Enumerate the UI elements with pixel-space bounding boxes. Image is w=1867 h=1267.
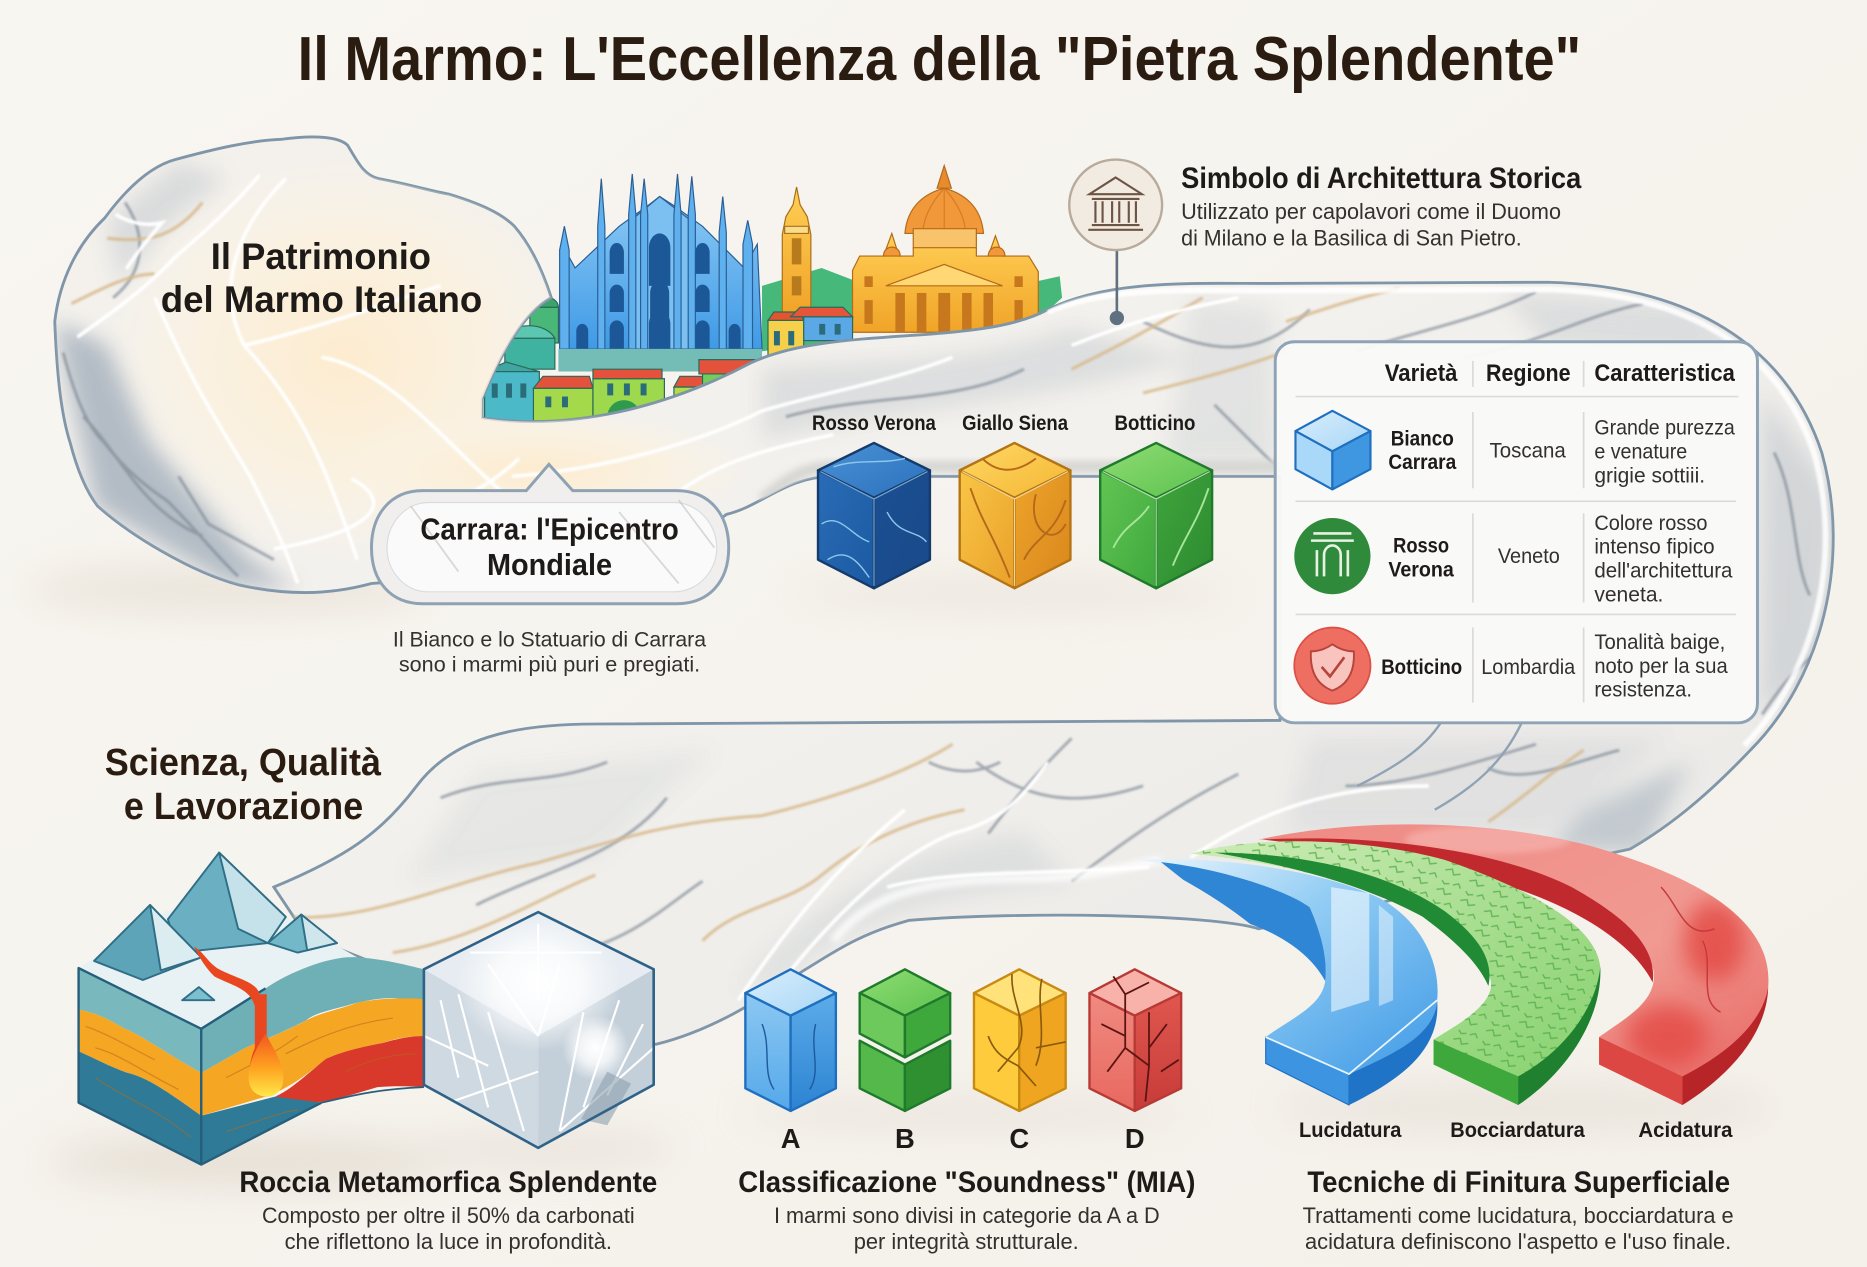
heading: patrimonio xyxy=(161,236,482,320)
row: Botticino: Lombardia xyxy=(1481,655,1575,679)
soundness block B: B xyxy=(895,1123,915,1154)
finish labels: Lucidatura xyxy=(1299,1118,1402,1142)
Basilica di San Pietro xyxy=(853,166,1038,332)
callout: Carrara: Carrara: l'Epicentro xyxy=(420,511,679,546)
text: architecture: Utilizzato per capolavori come il Duomo xyxy=(1181,199,1561,224)
row: Bianco Carrara: e venature xyxy=(1594,439,1687,463)
row: Rosso Verona: Verona xyxy=(1388,558,1454,581)
row: Bianco Carrara: Toscana xyxy=(1490,438,1566,462)
text: Carrara description: Il Bianco e lo Statuario di Carrara xyxy=(393,628,706,652)
heading: scienza xyxy=(105,742,382,828)
row: Rosso Verona: intenso fipico xyxy=(1594,535,1715,559)
text: roccia metamorfica xyxy=(239,1166,657,1254)
finish: lucidatura xyxy=(1131,859,1438,1105)
panel: marble rock and ribbon xyxy=(55,137,1840,1044)
right face layers xyxy=(201,957,424,1073)
town houses xyxy=(485,297,853,426)
text: finiture: Trattamenti come lucidatura, bocciardatura e xyxy=(1303,1203,1734,1228)
table headers xyxy=(1385,360,1736,387)
text: soundness: I marmi sono divisi in categorie da A a D xyxy=(774,1203,1160,1228)
marble block: Giallo Siena xyxy=(960,412,1070,588)
text: Carrara description: sono i marmi più puri e pregiati. xyxy=(399,653,700,677)
row: Bianco Carrara: Bianco xyxy=(1391,427,1454,450)
diagram: crystalline cube xyxy=(424,912,654,1148)
row: Rosso Verona: dell'architettura xyxy=(1594,559,1733,583)
finish labels: Acidatura xyxy=(1638,1118,1733,1142)
soundness block D xyxy=(1089,969,1181,1154)
soundness block C: C xyxy=(1009,1123,1029,1154)
text: architecture: di Milano e la Basilica di San Pietro. xyxy=(1181,225,1522,250)
Duomo di Milano xyxy=(560,174,762,349)
soundness block D: D xyxy=(1125,1123,1145,1154)
callout: Carrara xyxy=(371,464,729,604)
panel: varieties table xyxy=(1275,342,1757,723)
table headers: Regione xyxy=(1486,360,1571,387)
marble body xyxy=(55,137,1833,1044)
marble block: Giallo Siena: Giallo Siena xyxy=(962,412,1068,435)
city skyline illustration xyxy=(485,166,1062,426)
bevel lip of the ribbon xyxy=(762,467,1280,500)
row: Bianco Carrara: Carrara xyxy=(1388,451,1457,474)
row: Rosso Verona: Veneto xyxy=(1498,544,1560,568)
finish: bocciardatura xyxy=(1191,841,1600,1105)
speech tail lines under table xyxy=(1357,723,1522,810)
floor shadows xyxy=(24,566,1774,1187)
title: Il Marmo: L'Eccellenza della "Pietra Splendente" xyxy=(298,25,1581,94)
table headers: Caratteristica xyxy=(1594,360,1736,387)
text: finiture: Tecniche di Finitura Superficiale xyxy=(1307,1166,1730,1199)
text: roccia metamorfica: che riflettono la luce in profondità. xyxy=(285,1229,612,1254)
text: roccia metamorfica: Roccia Metamorfica Splendente xyxy=(239,1166,657,1199)
soundness block B xyxy=(860,969,950,1154)
marble block: Rosso Verona: Rosso Verona xyxy=(812,412,936,435)
bell tower xyxy=(782,187,811,313)
finish: acidatura xyxy=(1259,824,1768,1105)
row: Rosso Verona: Rosso xyxy=(1393,535,1449,558)
heading: patrimonio: Il Patrimonio xyxy=(211,236,431,277)
finish labels xyxy=(1299,1118,1733,1142)
soundness block A: A xyxy=(781,1123,801,1154)
marble ridge highlight xyxy=(833,860,1161,941)
top snow surface xyxy=(79,911,357,1029)
marble block: Botticino xyxy=(1100,412,1212,588)
text: roccia metamorfica: Composto per oltre il 50% da carbonati xyxy=(262,1203,635,1228)
row: Botticino xyxy=(1294,628,1728,704)
row: Botticino: noto per la sua xyxy=(1594,654,1728,678)
callout: Carrara: Mondiale xyxy=(487,547,612,582)
text: finiture xyxy=(1303,1166,1734,1254)
heading: scienza: e Lavorazione xyxy=(124,786,363,828)
soundness block C xyxy=(974,969,1066,1154)
text: finiture: acidatura definiscono l'aspetto e l'uso finale. xyxy=(1305,1229,1731,1254)
row: Rosso Verona: veneta. xyxy=(1594,582,1663,606)
row: Rosso Verona xyxy=(1294,511,1733,606)
text: soundness xyxy=(738,1166,1195,1254)
row: Bianco Carrara: Grande purezza xyxy=(1594,416,1735,440)
left face layers xyxy=(79,968,201,1073)
row: Botticino: resistenza. xyxy=(1594,678,1692,702)
icon: temple pin xyxy=(1069,160,1162,325)
soundness block A xyxy=(745,969,836,1154)
heading: patrimonio: del Marmo Italiano xyxy=(161,279,482,320)
row: Bianco Carrara: grigie sottiii. xyxy=(1594,463,1705,487)
diagram: geological block xyxy=(79,853,424,1165)
mountain peaks xyxy=(94,853,337,1000)
marble shading and veins xyxy=(55,155,1840,1000)
row: Rosso Verona: Colore rosso xyxy=(1594,511,1708,535)
table headers: Varietà xyxy=(1385,360,1458,387)
lava and flame xyxy=(194,947,281,1097)
marble block: Rosso Verona xyxy=(812,412,936,588)
row: Botticino: Botticino xyxy=(1381,656,1462,679)
row: Bianco Carrara xyxy=(1295,411,1735,489)
finish labels: Bocciardatura xyxy=(1450,1118,1586,1142)
text: soundness: Classificazione "Soundness" (MIA) xyxy=(738,1166,1195,1199)
hills behind buildings xyxy=(762,268,1062,351)
text: architecture xyxy=(1181,162,1582,250)
piazza base xyxy=(558,349,762,372)
text: soundness: per integrità strutturale. xyxy=(854,1229,1079,1254)
heading: scienza: Scienza, Qualità xyxy=(105,742,382,784)
marble block: Botticino: Botticino xyxy=(1114,412,1195,435)
text: Carrara description xyxy=(393,628,706,677)
text: architecture: Simbolo di Architettura Storica xyxy=(1181,162,1582,195)
row: Botticino: Tonalità baige, xyxy=(1594,630,1725,654)
